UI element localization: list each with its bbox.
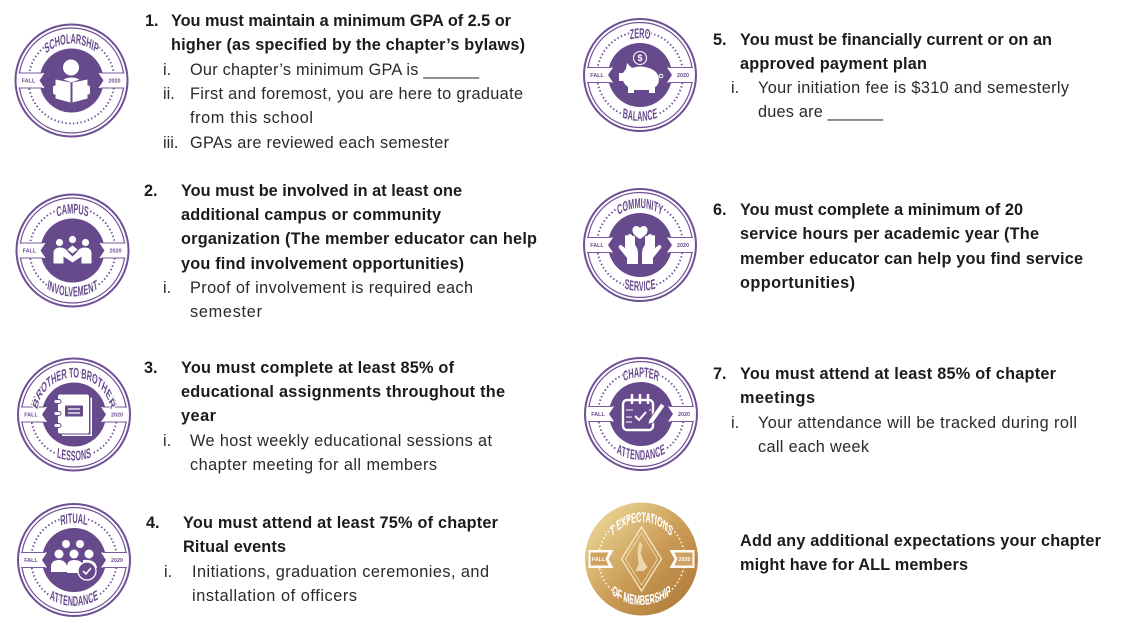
badge: Campus Involvement: INVOLVEMENT: [47, 280, 97, 296]
icon: group of three people: [54, 236, 92, 264]
text block: expectation 4: Initiations, graduation ceremonies, and: [192, 563, 489, 581]
badge: Scholarship: SCHOLARSHIP: [44, 34, 100, 53]
text block: expectation 4: [146, 514, 499, 605]
text block: expectation 1: i.: [163, 61, 171, 79]
badge: Community Service: COMMUNITY: [617, 198, 664, 214]
text block: expectation 5: 5.: [713, 31, 727, 49]
badge: Campus Involvement: [16, 194, 130, 308]
text block: expectation 7: [713, 365, 1077, 456]
badge: 7 Expectations of Membership (gold): OF MEMBERSHIP: [612, 586, 670, 605]
badge: Scholarship: [14, 24, 128, 138]
badge: Ritual Attendance: 2020: [111, 558, 123, 564]
text block: expectation 6: 6.: [713, 201, 727, 219]
badge: Zero Balance: FALL: [590, 73, 604, 79]
text block: expectation 7: You must attend at least 85% of chapter: [740, 365, 1057, 383]
text block: expectation 3: year: [181, 407, 217, 425]
text block: expectation 5: Your initiation fee is $310 and semesterly: [758, 79, 1070, 97]
text block: expectation 4: You must attend at least 75% of chapter: [183, 514, 499, 532]
text block: expectation 7: 7.: [713, 365, 727, 383]
text block: expectation 7: meetings: [740, 389, 815, 407]
icon: group with check mark: [51, 540, 97, 580]
text block: expectation 5: i.: [731, 79, 739, 97]
text block: expectation 3: educational assignments throughout the: [181, 383, 505, 401]
badge: Scholarship: 2020: [108, 78, 120, 84]
badge: Chapter Attendance: FALL: [591, 412, 605, 418]
badge: Chapter Attendance: CHAPTER: [622, 367, 660, 382]
text block: expectation 1: ii.: [163, 85, 175, 103]
text block: expectation 1: from this school: [190, 109, 313, 127]
text block: additional expectations: Add any additional expectations your chapter: [740, 532, 1102, 550]
icon: piggy bank and coin: $: [637, 53, 643, 63]
badge: Zero Balance: 2020: [677, 73, 689, 79]
text block: expectation 5: [713, 31, 1070, 121]
badge: Scholarship: FALL: [22, 78, 36, 84]
text block: expectation 3: You must complete at least 85% of: [181, 359, 455, 377]
badge: Zero Balance: [583, 18, 697, 132]
text block: expectation 6: You must complete a minimum of 20: [740, 201, 1023, 219]
text block: expectation 2: Proof of involvement is required each: [190, 279, 473, 297]
text block: expectation 1: 1.: [145, 12, 159, 30]
text block: expectation 3: i.: [163, 432, 171, 450]
badge: Chapter Attendance: [584, 357, 698, 471]
text block: expectation 6: [713, 201, 1083, 292]
badge: Community Service: [583, 188, 697, 302]
text block: expectation 7: i.: [731, 414, 739, 432]
badge: Zero Balance: BALANCE: [622, 108, 658, 121]
badge: Campus Involvement: CAMPUS: [56, 204, 88, 216]
badge: Brother to Brother Lessons: 2020: [111, 412, 123, 418]
badge: 7 Expectations of Membership (gold): FALL: [592, 557, 606, 563]
badge: Community Service: SERVICE: [624, 278, 656, 291]
text block: expectation 1: Our chapter’s minimum GPA is ______: [190, 61, 480, 79]
text block: expectation 6: opportunities): [740, 274, 855, 292]
text block: expectation 3: chapter meeting for all members: [190, 456, 437, 474]
text block: expectation 7: Your attendance will be tracked during roll: [758, 414, 1077, 432]
badge: Brother to Brother Lessons: LESSONS: [56, 448, 92, 461]
badge: Campus Involvement: FALL: [23, 248, 37, 254]
icon: hands holding heart: [619, 226, 661, 264]
text block: expectation 4: 4.: [146, 514, 160, 532]
badge: Chapter Attendance: 2020: [678, 412, 690, 418]
text block: expectation 1: First and foremost, you are here to graduate: [190, 85, 523, 103]
text block: expectation 5: approved payment plan: [740, 55, 927, 73]
badge: Chapter Attendance: ATTENDANCE: [616, 444, 666, 460]
text block: expectation 6: member educator can help you find service: [740, 250, 1083, 268]
text block: expectation 2: [144, 182, 537, 321]
text block: additional expectations: [740, 532, 1102, 574]
text block: expectation 1: higher (as specified by the chapter’s bylaws): [171, 36, 525, 54]
badge: Brother to Brother Lessons: FALL: [24, 412, 38, 418]
badge: 7 Expectations of Membership (gold): [585, 502, 698, 616]
text block: additional expectations: might have for ALL members: [740, 556, 968, 574]
badge: Zero Balance: ZERO: [629, 28, 651, 40]
text block: expectation 3: We host weekly educational sessions at: [190, 432, 492, 450]
icon: notebook: [54, 394, 92, 436]
text block: expectation 1: GPAs are reviewed each semester: [190, 134, 450, 152]
text block: expectation 2: 2.: [144, 182, 158, 200]
badge: Brother to Brother Lessons: BROTHER TO BROTHER: [32, 368, 116, 410]
text block: expectation 1: You must maintain a minimum GPA of 2.5 or: [171, 12, 512, 30]
text block: expectation 1: iii.: [163, 134, 178, 152]
icon: person reading book: [53, 60, 90, 102]
text block: expectation 3: 3.: [144, 359, 158, 377]
text block: expectation 5: You must be financially current or on an: [740, 31, 1052, 49]
badge: Ritual Attendance: RITUAL: [60, 513, 88, 526]
text block: expectation 2: organization (The member educator can help: [181, 230, 537, 248]
badge: Ritual Attendance: [17, 503, 131, 617]
text block: expectation 2: additional campus or community: [181, 206, 441, 224]
badge: Brother to Brother Lessons: [17, 358, 131, 472]
text block: expectation 1: [145, 12, 525, 152]
text block: expectation 5: dues are ______: [758, 103, 884, 121]
text block: expectation 2: You must be involved in at least one: [181, 182, 462, 200]
text block: expectation 7: call each week: [758, 438, 870, 456]
badge: Ritual Attendance: ATTENDANCE: [50, 590, 98, 606]
icon: diamond crest: [622, 527, 662, 591]
icon: calendar with pencil: [623, 394, 665, 430]
text block: expectation 4: installation of officers: [192, 587, 357, 605]
badge: 7 Expectations of Membership (gold): 7 EXPECTATIONS: [610, 512, 673, 536]
badge: Campus Involvement: 2020: [110, 248, 122, 254]
badge: Community Service: FALL: [590, 243, 604, 249]
badge: Community Service: 2020: [677, 243, 689, 249]
text block: expectation 2: semester: [190, 303, 263, 321]
text block: expectation 4: i.: [164, 563, 172, 581]
badge: 7 Expectations of Membership (gold): 2020: [678, 557, 690, 563]
text block: expectation 2: i.: [163, 279, 171, 297]
badge: Ritual Attendance: FALL: [24, 558, 38, 564]
text block: expectation 3: [144, 359, 505, 474]
text block: expectation 6: service hours per academic year (The: [740, 225, 1039, 243]
text block: expectation 2: you find involvement opportunities): [181, 255, 464, 273]
text block: expectation 4: Ritual events: [183, 538, 286, 556]
